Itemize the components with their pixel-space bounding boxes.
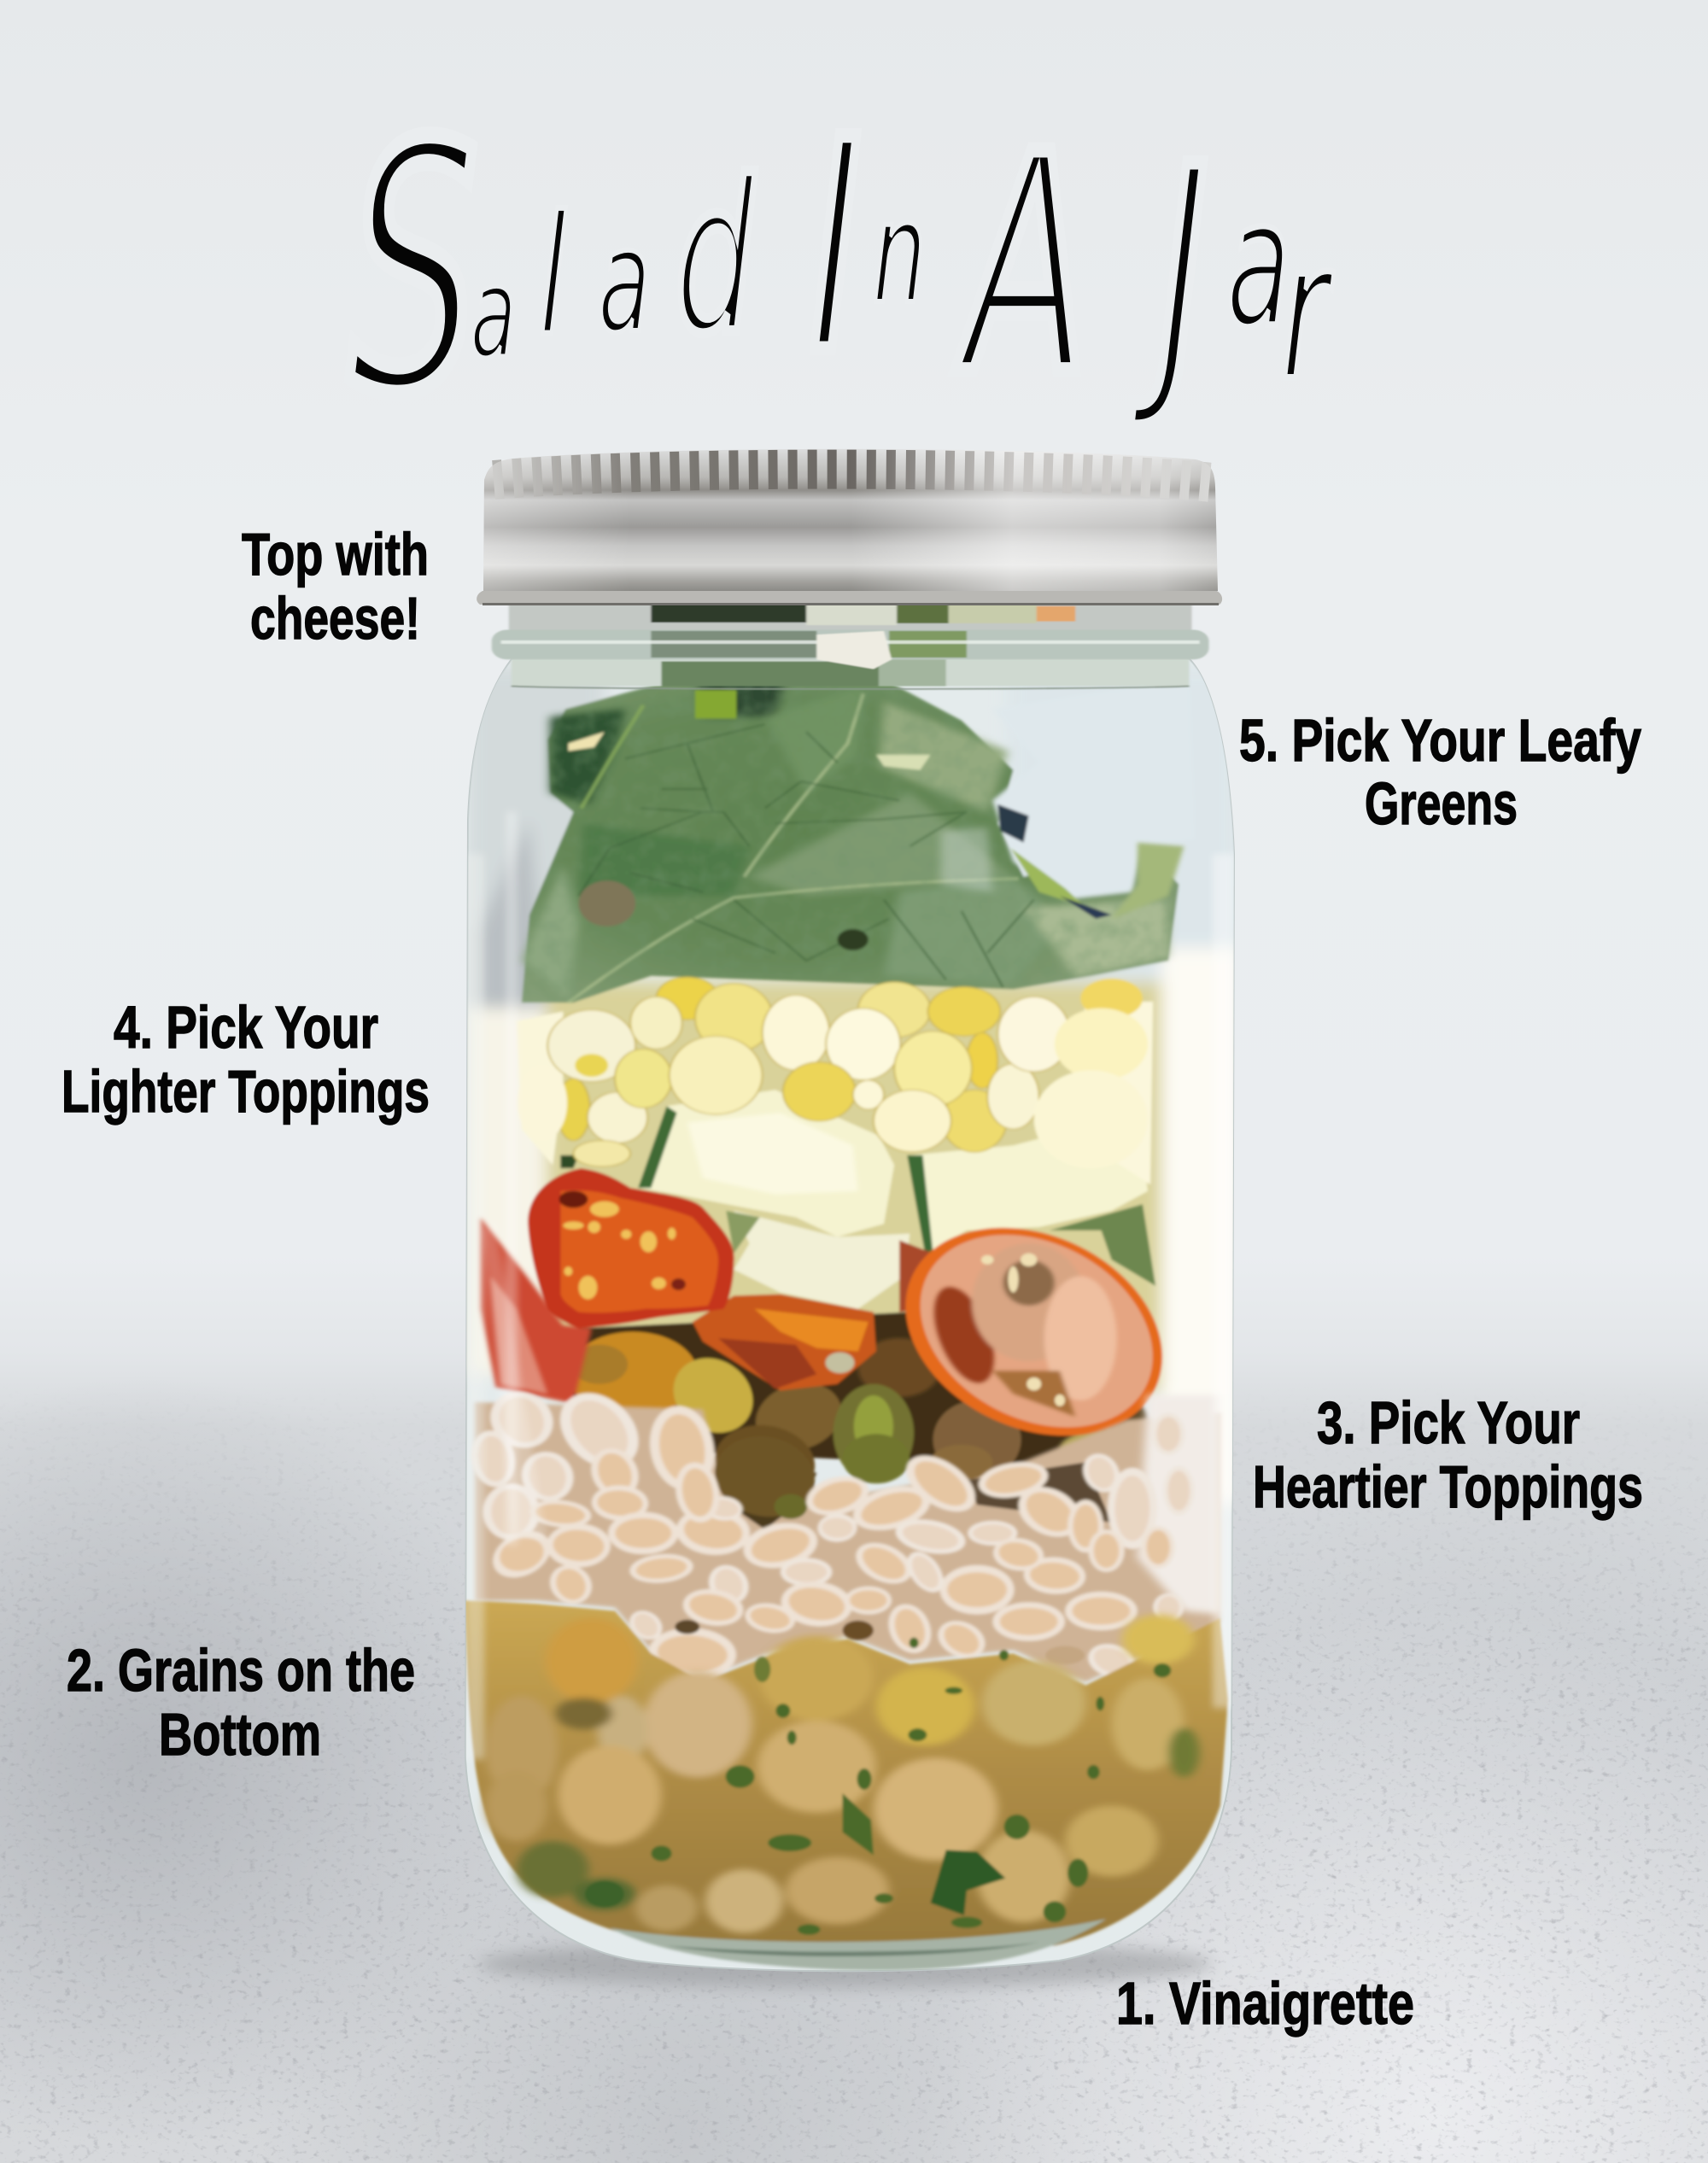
mason jar — [465, 449, 1238, 1971]
label: step 5 leafy greens: Greens — [1365, 770, 1518, 837]
label: step 3 heartier toppings: 3. Pick Your — [1317, 1389, 1580, 1456]
title: a — [1226, 162, 1291, 367]
title: a — [598, 197, 651, 365]
title: a — [471, 241, 516, 386]
label: step 2 grains — [67, 1637, 415, 1768]
label: step 4 lighter toppings: Lighter Toppings — [61, 1058, 430, 1125]
lid ribbing — [494, 470, 1213, 482]
title: I — [810, 77, 862, 418]
title: n — [873, 172, 927, 336]
label: step 2 grains: Bottom — [159, 1701, 321, 1768]
jar contents — [465, 666, 1238, 1970]
lid — [477, 449, 1222, 605]
glass reflections over leaf — [568, 679, 1195, 950]
label: top with cheese — [242, 521, 429, 652]
title: A — [953, 91, 1088, 441]
left tomato — [528, 1168, 734, 1329]
cilantro flecks — [585, 1638, 1171, 1935]
right tomato — [904, 1226, 1164, 1438]
background: studio wall and stone table — [0, 1364, 1708, 2163]
jar neck and threaded ring — [492, 605, 1209, 689]
layer 1: vinaigrette with chickpeas — [465, 1600, 1228, 1945]
label: top with cheese: cheese! — [250, 585, 420, 652]
label: step 1 vinaigrette: 1. Vinaigrette — [1116, 1970, 1414, 2037]
glass body — [465, 659, 1234, 1971]
label: top with cheese: Top with — [242, 521, 429, 588]
lid flange — [477, 591, 1222, 605]
leaf mottling texture — [550, 687, 1173, 970]
label: step 2 grains: 2. Grains on the — [67, 1637, 415, 1704]
layer 4: lighter toppings, cucumber — [560, 1090, 1155, 1312]
layer 4: lighter toppings, corn — [517, 977, 1153, 1184]
glass wall highlights — [465, 811, 1235, 1759]
label: step 5 leafy greens — [1239, 707, 1641, 837]
title: J — [1129, 106, 1208, 437]
upper glass interior tints — [468, 666, 1238, 1503]
label: step 3 heartier toppings — [1253, 1389, 1643, 1520]
layer 2: farro grains — [468, 1385, 1220, 1684]
label: step 4 lighter toppings: 4. Pick Your — [114, 994, 378, 1061]
title: d — [675, 136, 756, 380]
title: S — [348, 72, 478, 470]
label: step 4 lighter toppings — [61, 994, 430, 1125]
title: r — [1281, 202, 1335, 423]
title: l — [539, 180, 566, 372]
jar shadow on table — [478, 1940, 1213, 1988]
layer 3: heartier toppings, nuts — [572, 1310, 1149, 1474]
layer 5: leafy greens — [522, 671, 1179, 1003]
glass bottom of jar — [610, 1919, 1107, 1970]
layer 3: heartier toppings, tomatoes — [477, 1166, 1164, 1438]
